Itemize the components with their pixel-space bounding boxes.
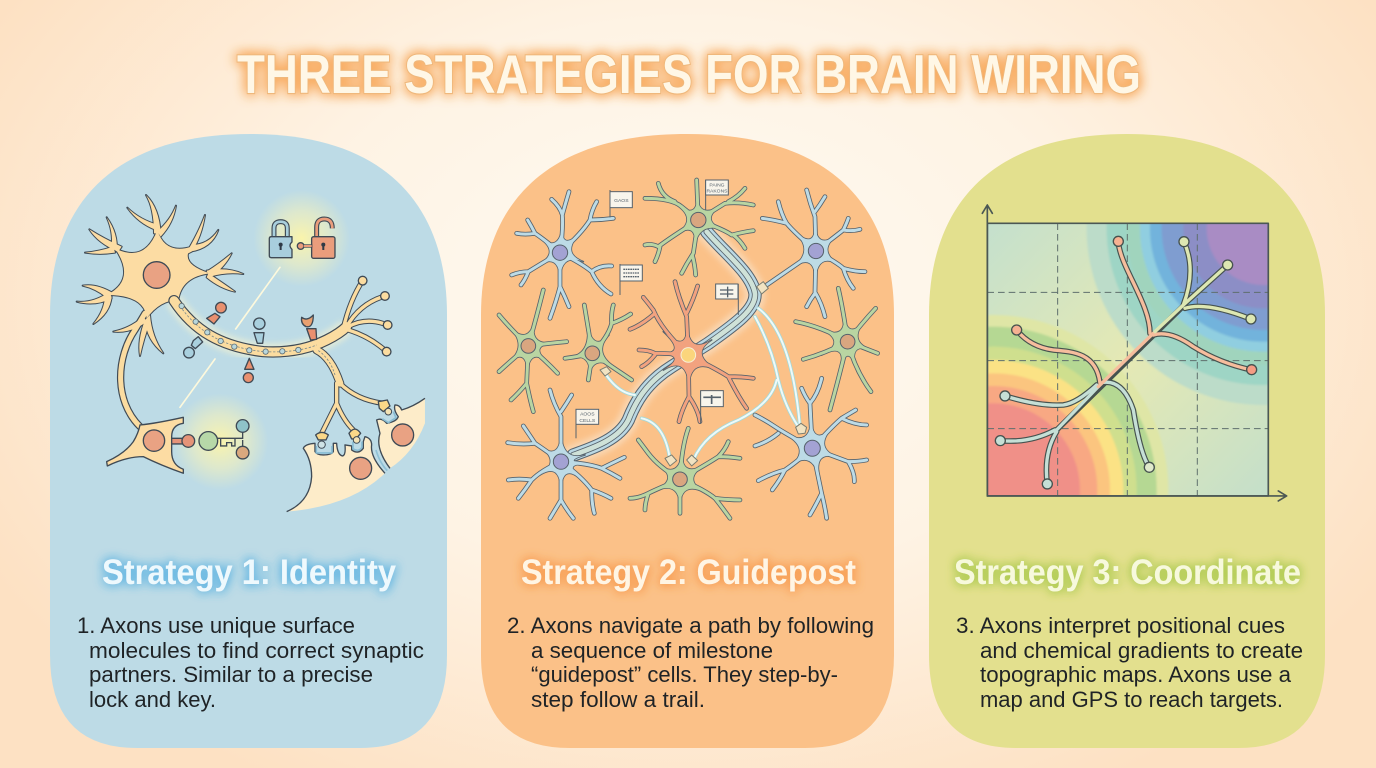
heading: strategy 3: Strategy 3: Coordinate xyxy=(954,553,1301,592)
description: strategy 1: molecules to find correct synaptic xyxy=(89,638,424,663)
icon: key glow xyxy=(172,393,268,490)
icon: locked padlock xyxy=(269,222,292,258)
icon: lock glow xyxy=(253,190,350,287)
panel: strategy 1 identity xyxy=(50,134,447,748)
green neuron right xyxy=(796,288,878,410)
connector lines xyxy=(180,267,280,407)
blue neuron bottom right xyxy=(755,378,867,518)
orange central neuron xyxy=(630,282,753,422)
axon bundle xyxy=(573,232,755,455)
flag: guidepost 2: RAKONS xyxy=(706,189,728,195)
description: strategy 2: “guidepost” cells. They step-by- xyxy=(531,662,838,687)
blue neuron top right xyxy=(762,190,865,317)
flag: guidepost 2: PAING xyxy=(709,183,725,189)
green neuron inner left xyxy=(565,305,632,380)
flag: guidepost 6: AOOS xyxy=(580,412,595,418)
flag: guidepost 6: CELLS xyxy=(579,418,596,424)
description: strategy 1: 1. Axons use unique surface xyxy=(77,613,355,638)
green neuron bottom xyxy=(630,428,740,518)
gradient map xyxy=(988,224,1268,495)
axon tree xyxy=(995,236,1257,489)
main neuron xyxy=(77,195,392,448)
target cells xyxy=(287,398,425,512)
flag: guidepost 1 xyxy=(610,190,632,217)
description: strategy 2: a sequence of milestone xyxy=(531,638,773,663)
description: strategy 2: 2. Axons navigate a path by following xyxy=(507,613,874,638)
blue neuron top left xyxy=(512,192,613,318)
green neuron top xyxy=(645,180,753,275)
description: strategy 2 xyxy=(507,613,874,712)
flag: guidepost 6 xyxy=(576,409,599,438)
illustration: neuron lock and key xyxy=(77,190,425,512)
blue neuron bottom left xyxy=(508,390,624,518)
panel: strategy 3 coordinate xyxy=(929,134,1325,748)
illustration: topographic gradient map xyxy=(982,204,1288,502)
description: strategy 1: partners. Similar to a precise xyxy=(89,662,373,687)
title: THREE STRATEGIES FOR BRAIN WIRING xyxy=(237,43,1141,105)
heading: strategy 1: Strategy 1: Identity xyxy=(102,553,396,592)
icon: unlocked padlock xyxy=(297,219,335,258)
flag: signpost 4 xyxy=(716,284,738,315)
green neuron left xyxy=(499,290,567,412)
surface molecules on axon xyxy=(184,302,317,383)
description: strategy 3: map and GPS to reach targets. xyxy=(980,687,1283,712)
description: strategy 3: and chemical gradients to create xyxy=(980,638,1303,663)
description: strategy 2: step follow a trail. xyxy=(531,687,705,712)
description: strategy 3: 3. Axons interpret positional cues xyxy=(956,613,1285,638)
grid lines xyxy=(987,223,1268,496)
flag: guidepost 1: GAOS xyxy=(614,198,629,204)
axes xyxy=(982,205,1287,501)
description: strategy 1 xyxy=(77,613,424,712)
illustration: guidepost neuron network xyxy=(499,180,878,518)
description: strategy 3 xyxy=(956,613,1303,712)
synaptic contacts xyxy=(600,282,807,466)
flag: signpost 5 xyxy=(701,391,723,423)
heading: strategy 2: Strategy 2: Guidepost xyxy=(521,553,856,592)
panel: strategy 2 guidepost xyxy=(481,134,894,748)
small neuron with receptor xyxy=(107,417,195,473)
flag: guidepost 3 xyxy=(620,264,642,295)
description: strategy 1: lock and key. xyxy=(89,687,216,712)
guiding growth paths xyxy=(605,308,800,460)
icon: key xyxy=(199,420,249,459)
flag: guidepost 2 xyxy=(706,180,728,210)
description: strategy 3: topographic maps. Axons use a xyxy=(980,662,1291,687)
